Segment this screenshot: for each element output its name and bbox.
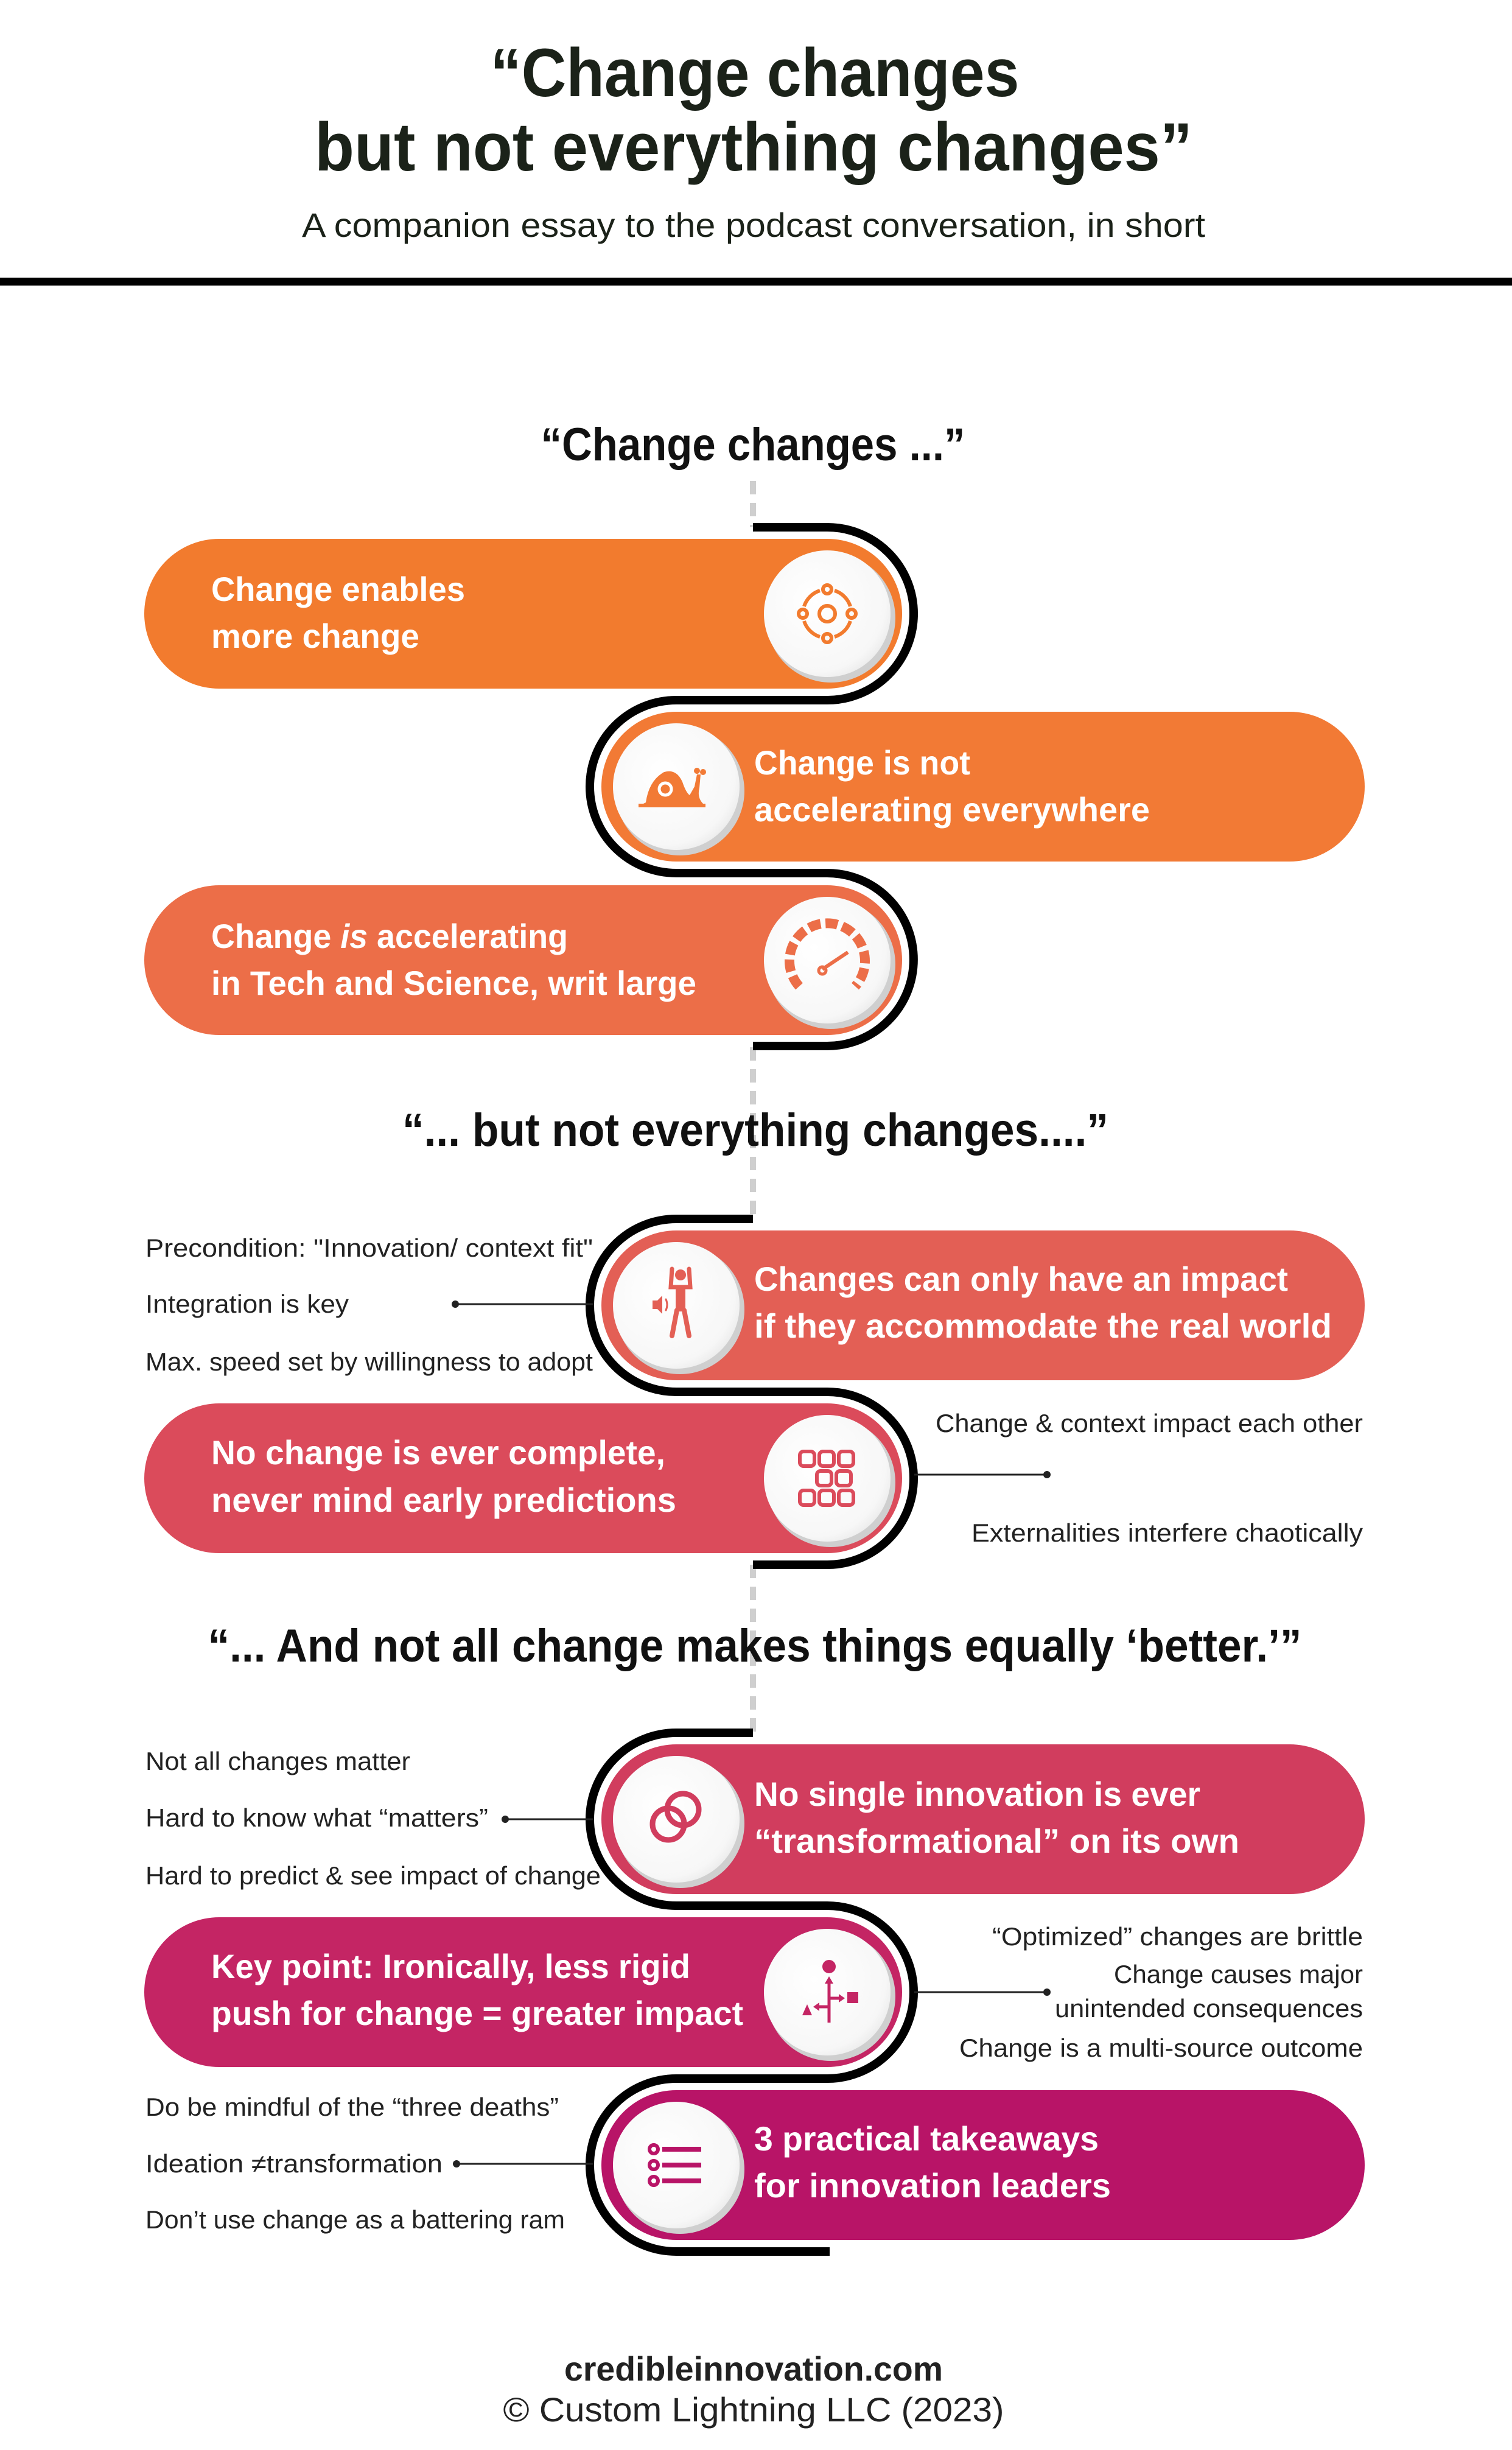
title: but not everything changes”: [315, 109, 1192, 185]
side notes right of pill 5: Externalities interfere chaotically: [971, 1518, 1363, 1547]
pill 7: key point: push for change = greater impact: [211, 1994, 743, 2032]
pill 7: key point: [144, 1917, 902, 2067]
side notes right of pill 7: Change causes major: [1114, 1960, 1363, 1988]
icon: cycle: [799, 585, 856, 642]
connector path section 1: [590, 527, 914, 1046]
side notes left of pill 4: Max. speed set by willingness to adopt: [145, 1347, 593, 1376]
pill 3: change is accelerating in tech and science: in Tech and Science, writ large: [211, 964, 696, 1002]
side notes left of pill 6: Hard to predict & see impact of change: [145, 1861, 601, 1890]
pill 1: change enables more change: more change: [211, 617, 419, 655]
pill 3: change is accelerating in tech and science: [144, 885, 902, 1035]
connector path section 2: [590, 1219, 914, 1565]
heading 3: “... And not all change makes things equally ‘better.’”: [208, 1620, 1301, 1672]
pill 4: changes can only have an impact: [601, 1230, 1365, 1380]
footer: [503, 2350, 1004, 2429]
side notes left of pill 4: Precondition: "Innovation/ context fit": [145, 1234, 593, 1262]
connector path section 3: [590, 1733, 914, 2252]
pill 1: change enables more change: Change enables: [211, 570, 465, 608]
icon: linked rings: [653, 1794, 699, 1840]
side notes left of pill 6: [145, 1747, 601, 1890]
subtitle: A companion essay to the podcast conversation, in short: [302, 206, 1205, 244]
footer: credibleinnovation.com: [564, 2350, 943, 2388]
side notes right of pill 7: unintended consequences: [1055, 1994, 1363, 2023]
pill 6: no single innovation is transformational: [601, 1744, 1365, 1894]
side notes right of pill 5: Change & context impact each other: [936, 1409, 1363, 1437]
side notes right of pill 5: [914, 1409, 1363, 1547]
side notes left of pill 8: [145, 2093, 593, 2234]
pill 6: no single innovation is transformational: “transformational” on its own: [754, 1822, 1239, 1860]
heading 2: “... but not everything changes....”: [402, 1104, 1108, 1156]
pill 7: key point: Key point: Ironically, less rigid: [211, 1947, 690, 1985]
title: [315, 35, 1192, 185]
pill 8: 3 practical takeaways: 3 practical takeaways: [754, 2119, 1099, 2158]
side notes right of pill 7: [914, 1922, 1363, 2062]
side notes left of pill 4: Integration is key: [145, 1290, 349, 1318]
icon: snail: [639, 768, 706, 807]
pill 5: no change is ever complete: No change is ever complete,: [211, 1433, 665, 1472]
pill 2: change is not accelerating everywhere: accelerating everywhere: [754, 790, 1150, 829]
pill 8: 3 practical takeaways: [601, 2090, 1365, 2240]
pill 4: changes can only have an impact: if they accommodate the real world: [754, 1307, 1332, 1345]
icon: list: [649, 2145, 701, 2185]
pill 8: 3 practical takeaways: for innovation leaders: [754, 2166, 1111, 2205]
side notes left of pill 8: Do be mindful of the “three deaths”: [145, 2093, 559, 2121]
side notes left of pill 6: Not all changes matter: [145, 1747, 410, 1775]
pill 3: change is accelerating in tech and science: Change is accelerating: [211, 917, 568, 955]
heading 1: “Change changes ...”: [541, 419, 965, 471]
side notes right of pill 7: Change is a multi-source outcome: [959, 2034, 1363, 2062]
pill 4: changes can only have an impact: Changes can only have an impact: [754, 1260, 1288, 1298]
icon: decision paths: [802, 1960, 858, 2023]
pill 2: change is not accelerating everywhere: [601, 712, 1365, 862]
pill 1: change enables more change: [144, 539, 902, 689]
side notes left of pill 8: Don’t use change as a battering ram: [145, 2205, 565, 2234]
pill 5: no change is ever complete: [144, 1403, 902, 1553]
dashed center line: [750, 481, 756, 1733]
icon: grid of blocks: [800, 1451, 853, 1505]
footer: © Custom Lightning LLC (2023): [503, 2390, 1004, 2429]
icon: person with speaker: [653, 1269, 690, 1336]
pill 2: change is not accelerating everywhere: Change is not: [754, 743, 970, 782]
pill 6: no single innovation is transformational: No single innovation is ever: [754, 1775, 1200, 1813]
side notes left of pill 4: [145, 1234, 593, 1376]
icon: speedometer: [789, 923, 865, 986]
side notes right of pill 7: “Optimized” changes are brittle: [992, 1922, 1363, 1951]
side notes left of pill 6: Hard to know what “matters”: [145, 1803, 488, 1832]
pill 5: no change is ever complete: never mind early predictions: [211, 1481, 676, 1519]
title: “Change changes: [491, 35, 1019, 111]
side notes left of pill 8: Ideation ≠transformation: [145, 2149, 443, 2178]
